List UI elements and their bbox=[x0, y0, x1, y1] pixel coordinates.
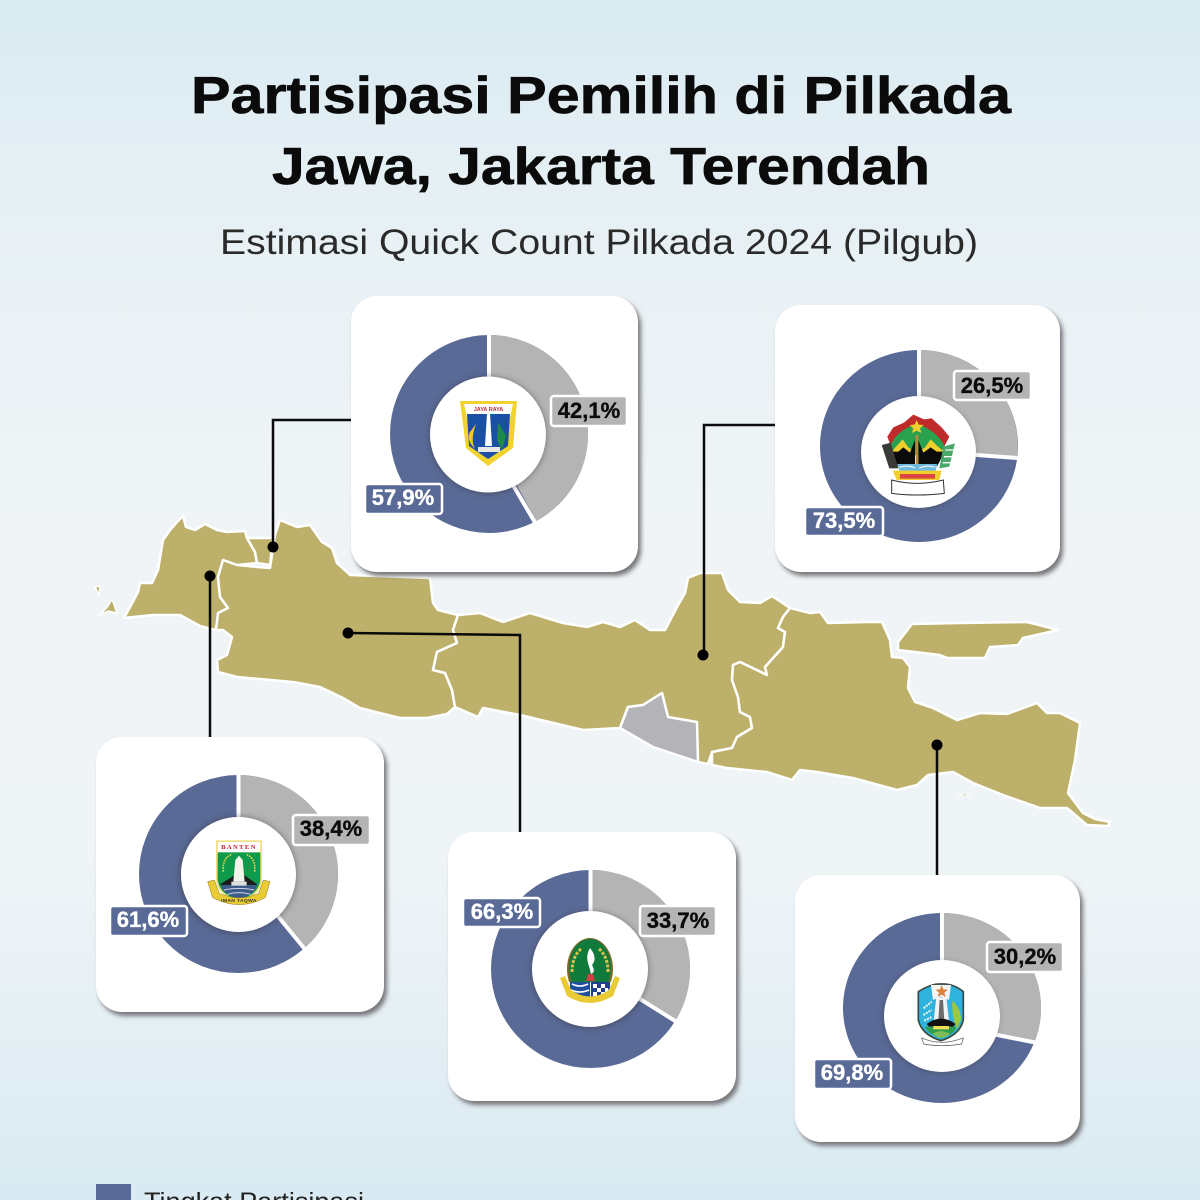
donut: Jakarta bbox=[411, 330, 567, 531]
logo: Jakarta: JAYA RAYA bbox=[474, 407, 503, 413]
donut: East Java bbox=[843, 908, 1041, 1103]
label: 42,1% bbox=[551, 396, 627, 426]
map region: Yogyakarta bbox=[620, 693, 698, 762]
label: 61,6% bbox=[110, 906, 187, 936]
label: 73,5%: 73,5% bbox=[813, 508, 875, 533]
donut: West Java bbox=[512, 865, 680, 1047]
label: 57,9%: 57,9% bbox=[372, 485, 434, 510]
panel: Banten bbox=[96, 737, 387, 1016]
map region: Jakarta bbox=[247, 538, 273, 565]
logo: Banten bbox=[208, 840, 270, 905]
label: 66,3%: 66,3% bbox=[471, 899, 533, 924]
panel: East Java bbox=[795, 875, 1083, 1146]
panel: Jakarta bbox=[351, 296, 641, 576]
label: 38,4%: 38,4% bbox=[300, 816, 362, 841]
label: 73,5% bbox=[805, 507, 883, 536]
map: Banten islands bbox=[95, 586, 117, 615]
connector: East Java bbox=[932, 740, 942, 875]
panel: Central Java bbox=[775, 305, 1063, 576]
label: 69,8%: 69,8% bbox=[821, 1060, 883, 1085]
label: 69,8% bbox=[814, 1059, 891, 1089]
logo: West Java bbox=[560, 938, 620, 1003]
connector: Central Java bbox=[698, 425, 776, 660]
logo: Jakarta bbox=[460, 401, 517, 466]
label: 66,3% bbox=[463, 898, 540, 927]
title: Jawa, Jakarta Terendah bbox=[272, 138, 930, 196]
map region: Central Java bbox=[433, 573, 790, 764]
logo: East Java bbox=[918, 984, 963, 1046]
logo: Banten: IMAN TAQWA bbox=[221, 898, 257, 904]
label: 61,6%: 61,6% bbox=[117, 907, 179, 932]
map: Java bbox=[95, 516, 1110, 826]
logo: Banten: BANTEN bbox=[221, 844, 257, 851]
donut: Central Java bbox=[820, 345, 1024, 542]
map region: Madura bbox=[898, 622, 1058, 658]
subtitle: Estimasi Quick Count Pilkada 2024 (Pilgub) bbox=[220, 223, 978, 262]
label: 33,7%: 33,7% bbox=[647, 908, 709, 933]
connector: Jakarta bbox=[268, 420, 352, 552]
map region: Banten bbox=[124, 516, 257, 630]
legend swatch bbox=[96, 1184, 131, 1200]
legend bbox=[96, 1184, 364, 1200]
connector: Banten bbox=[204, 570, 216, 737]
panel: West Java bbox=[448, 832, 739, 1105]
connector: West Java bbox=[342, 628, 520, 833]
label: 30,2% bbox=[987, 942, 1063, 972]
label: 26,5% bbox=[954, 371, 1031, 400]
logo: Central Java bbox=[882, 415, 955, 495]
label: 38,4% bbox=[293, 815, 370, 845]
label: 57,9% bbox=[365, 484, 442, 514]
title: Partisipasi Pemilih di Pilkada bbox=[191, 67, 1012, 125]
map: small islet bbox=[958, 794, 970, 796]
map region: West Java bbox=[216, 520, 458, 718]
label: 26,5%: 26,5% bbox=[961, 373, 1023, 398]
label: 33,7% bbox=[640, 906, 716, 936]
donut: Banten bbox=[160, 770, 317, 953]
title bbox=[191, 67, 1012, 196]
label: 30,2%: 30,2% bbox=[994, 944, 1056, 969]
map region: East Java bbox=[712, 608, 1110, 826]
label: 42,1%: 42,1% bbox=[558, 398, 620, 423]
